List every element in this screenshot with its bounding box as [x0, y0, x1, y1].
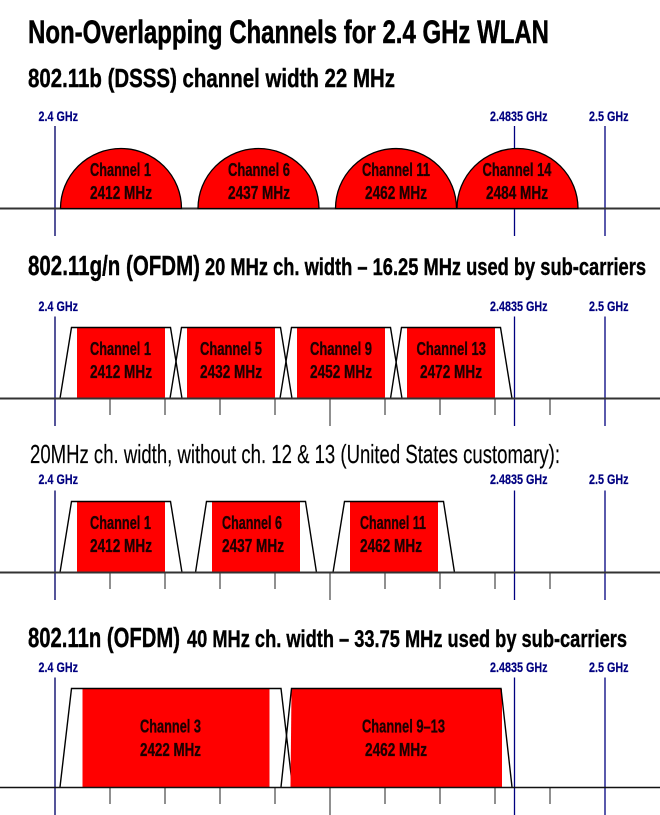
frequency marker: 2.4835 GHz: 2.4835 GHz [490, 472, 548, 487]
frequency marker: 2.5 GHz: 2.5 GHz [589, 109, 629, 124]
channel 1: Channel 1 [90, 339, 151, 359]
channel 3: 2422 MHz [140, 740, 201, 760]
heading: 802.11n [28, 622, 627, 653]
channel 6 dome: Channel 6 [228, 160, 290, 180]
channel 11: Channel 11 [360, 513, 426, 533]
frequency marker: 2.4 GHz: 2.4 GHz [38, 660, 78, 675]
frequency marker: 2.5 GHz: 2.5 GHz [589, 299, 629, 314]
tick marks [110, 399, 550, 426]
panel: 802.11b DSSS chart [0, 109, 660, 236]
channel 11: 2462 MHz [360, 536, 422, 556]
frequency marker: 2.4835 GHz: 2.4835 GHz [490, 299, 548, 314]
channel 13: 2472 MHz [420, 362, 482, 382]
channel 6: 2437 MHz [222, 536, 284, 556]
channel 11 dome: Channel 11 [362, 160, 430, 180]
channel 13 [390, 328, 512, 398]
channel 1 dome: Channel 1 [90, 160, 151, 180]
channel 3: Channel 3 [140, 716, 201, 736]
channel 11 [333, 502, 454, 572]
frequency marker: 2.5 GHz: 2.5 GHz [589, 472, 629, 487]
heading: 802.11g/n [28, 250, 646, 281]
tick marks [110, 573, 550, 600]
frequency marker: 2.4 GHz [38, 299, 78, 426]
channel 5: Channel 5 [200, 339, 262, 359]
channel 1 dome: 2412 MHz [90, 183, 152, 203]
channel 5: 2432 MHz [200, 362, 262, 382]
channel 9-13: 2462 MHz [365, 740, 427, 760]
heading: 802.11n: 802.11n (OFDM) [28, 622, 180, 653]
panel: 802.11n 40 MHz chart [0, 660, 660, 815]
frequency marker: 2.4835 GHz: 2.4835 GHz [490, 660, 548, 675]
frequency marker: 2.4 GHz: 2.4 GHz [38, 299, 78, 314]
channel 14 dome: Channel 14 [482, 160, 552, 180]
heading: 802.11g/n: 802.11g/n (OFDM) [28, 250, 200, 281]
channel 6 dome [198, 149, 319, 208]
frequency marker: 2.4 GHz: 2.4 GHz [38, 109, 78, 124]
channel 9-13: Channel 9–13 [362, 716, 445, 736]
channel 13: Channel 13 [416, 339, 486, 359]
frequency marker: 2.4 GHz [38, 109, 78, 236]
frequency marker: 2.5 GHz [589, 299, 629, 426]
frequency marker: 2.5 GHz: 2.5 GHz [589, 660, 629, 675]
tick marks [110, 788, 550, 815]
panel: 802.11g/n 20 MHz chart [0, 299, 660, 426]
channel 11 dome [336, 149, 456, 208]
frequency marker: 2.4835 GHz [490, 299, 548, 426]
channel 1 [60, 328, 182, 398]
channel 9 [280, 328, 402, 398]
channel 6 dome: 2437 MHz [228, 183, 290, 203]
channel 1: 2412 MHz [90, 536, 152, 556]
channel 9-13 [281, 688, 512, 787]
channel 3 [60, 688, 292, 787]
heading: 802.11b: 802.11b (DSSS) channel width 22 MHz [28, 63, 395, 93]
channel 14 dome [457, 149, 578, 208]
channel 9: 2452 MHz [310, 362, 372, 382]
channel 1: Channel 1 [90, 513, 151, 533]
panel: US customary 20 MHz chart [0, 472, 660, 600]
frequency marker: 2.4 GHz [38, 472, 78, 600]
frequency marker: 2.5 GHz [589, 109, 629, 236]
channel 5 [170, 328, 292, 398]
axis [0, 786, 660, 788]
channel 14 dome: 2484 MHz [486, 183, 548, 203]
channel 1: 2412 MHz [90, 362, 152, 382]
channel 6: Channel 6 [222, 513, 282, 533]
frequency marker: 2.4 GHz: 2.4 GHz [38, 472, 78, 487]
frequency marker: 2.5 GHz [589, 472, 629, 600]
axis [0, 572, 660, 574]
channel 11 dome: 2462 MHz [365, 183, 427, 203]
channel 6 [196, 502, 316, 572]
axis [0, 398, 660, 400]
channel 9: Channel 9 [310, 339, 372, 359]
channel 1 [60, 502, 182, 572]
frequency marker: 2.4835 GHz: 2.4835 GHz [490, 109, 548, 124]
frequency marker: 2.4835 GHz [490, 109, 548, 236]
axis [0, 208, 660, 210]
channel 1 dome [60, 149, 182, 208]
frequency marker: 2.4835 GHz [490, 472, 548, 600]
